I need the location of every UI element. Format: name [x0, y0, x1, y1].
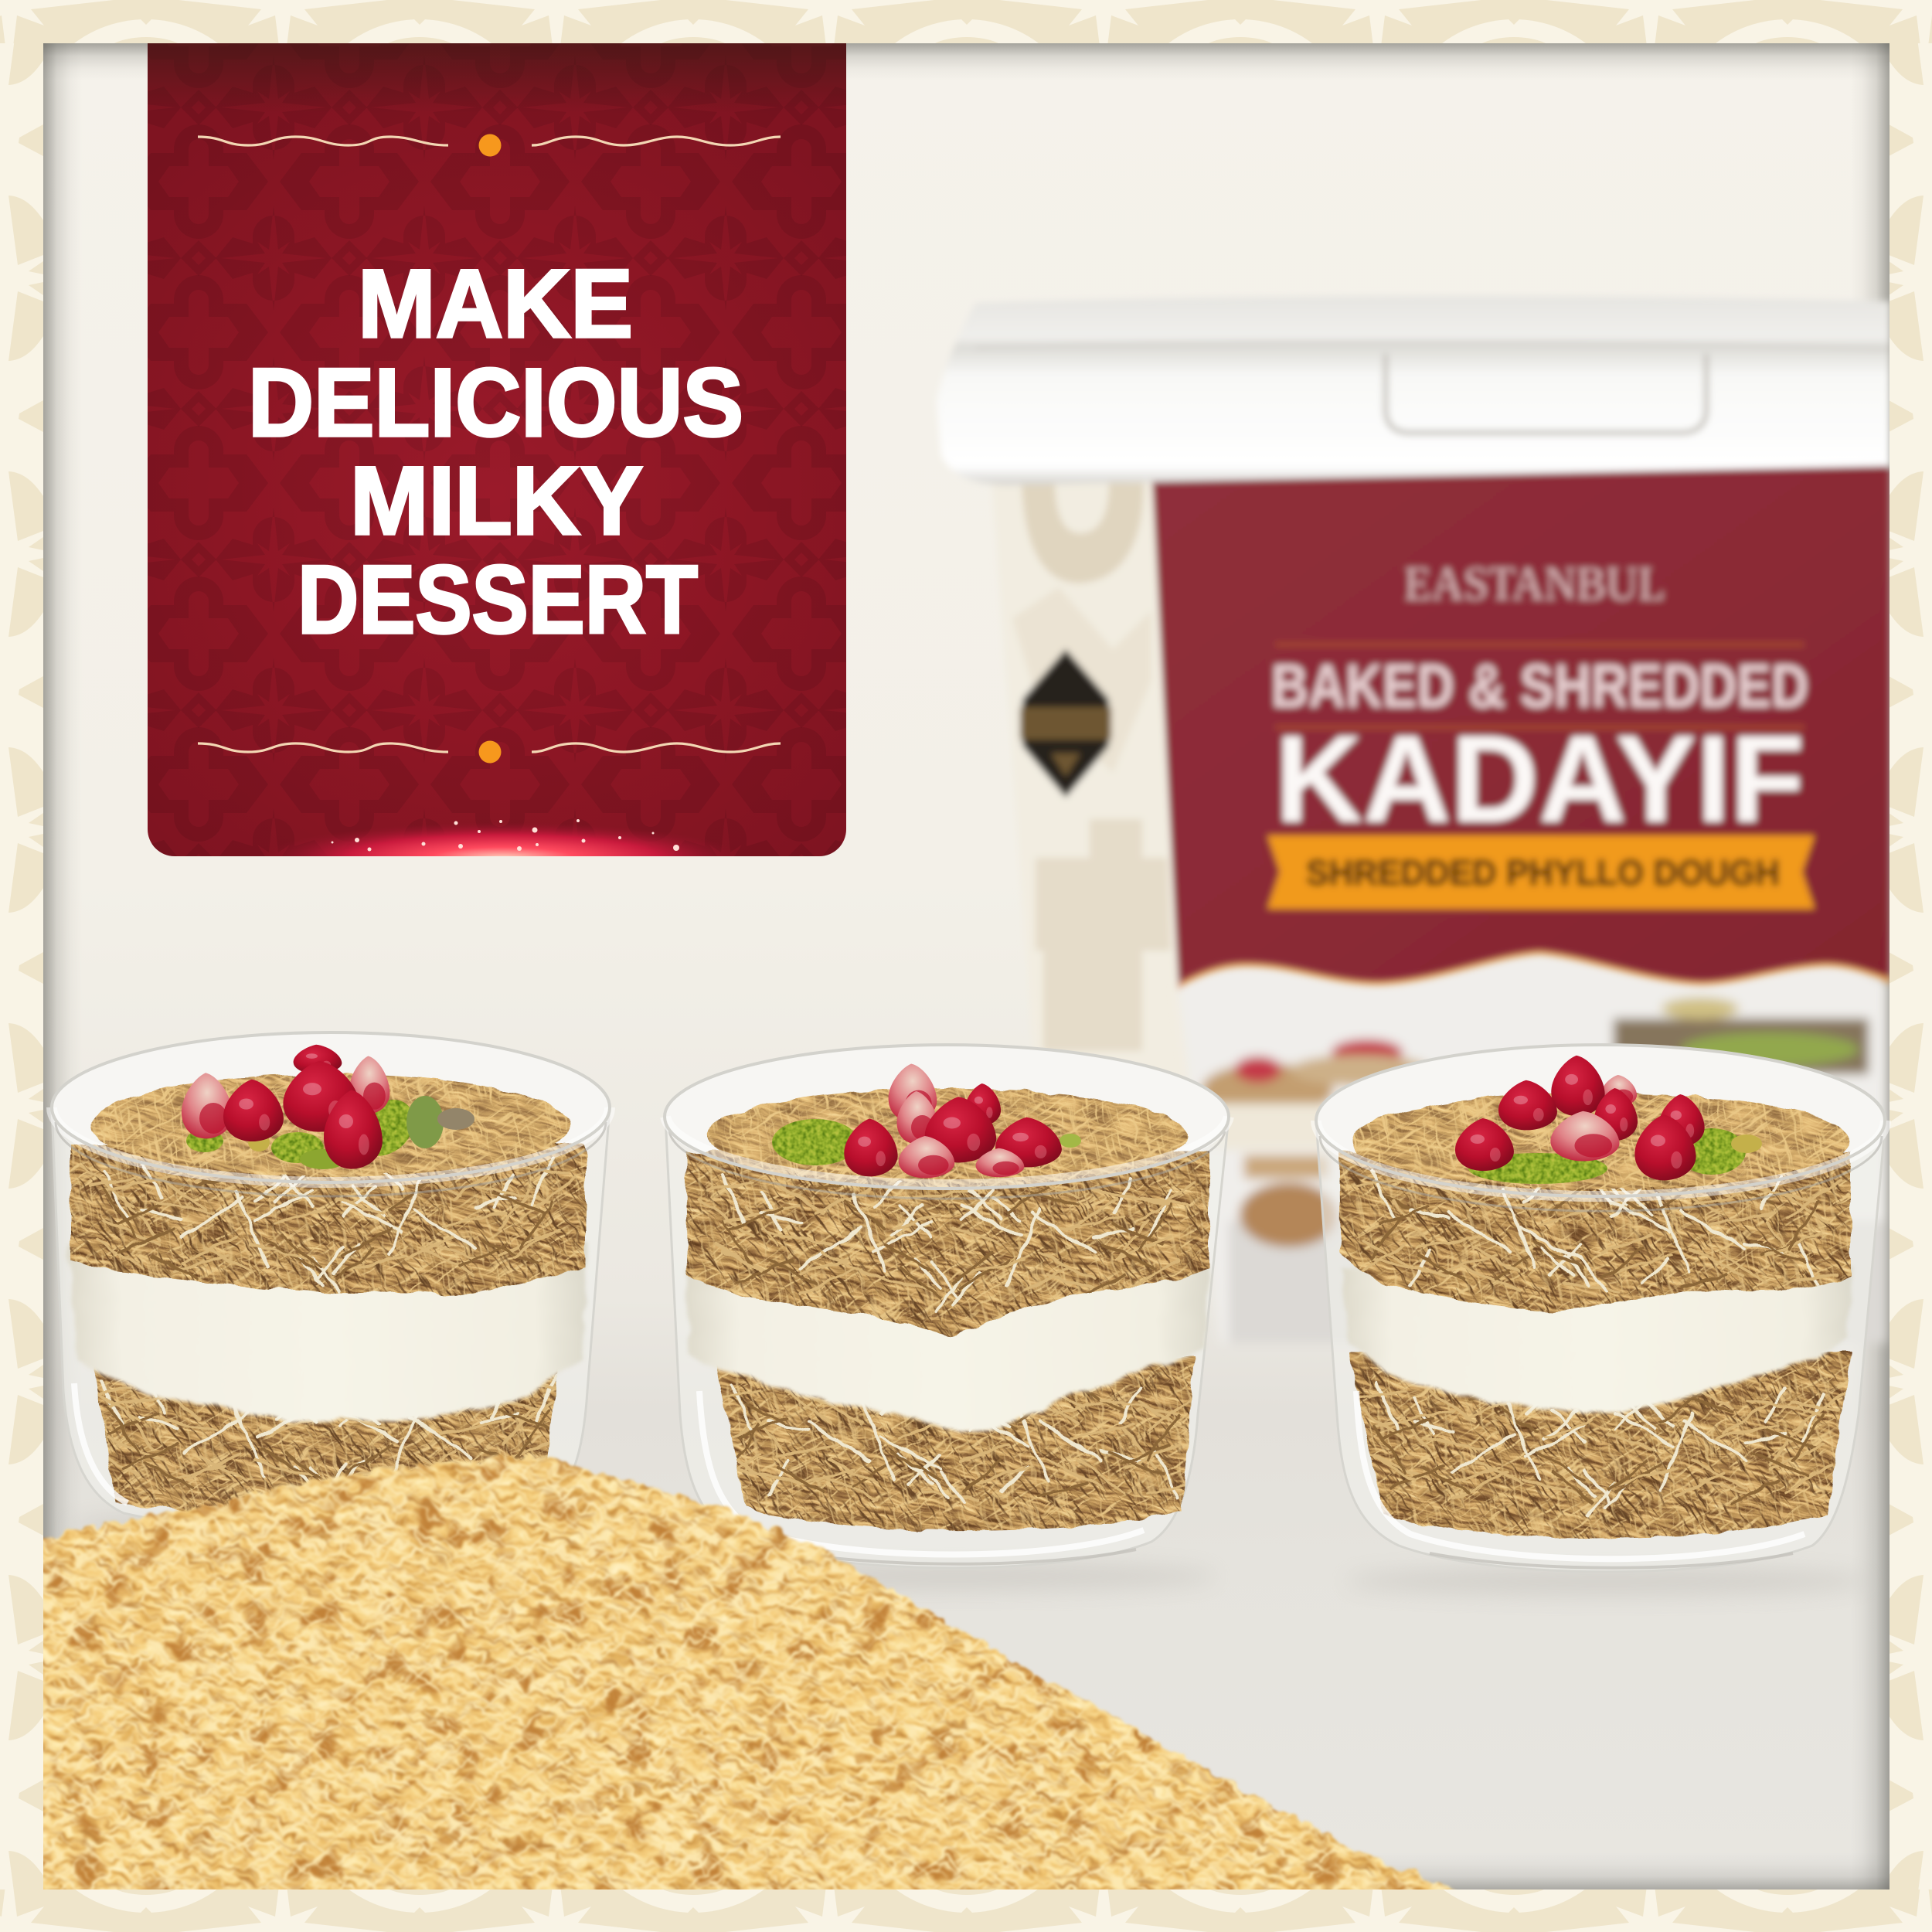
pistachio crumbs — [772, 1119, 1081, 1165]
glass body — [52, 1032, 610, 1532]
pistachio crumbs — [186, 1096, 474, 1169]
glass rim — [52, 1032, 610, 1503]
label text: kadayif: KADAYIF — [1275, 709, 1804, 848]
label photo area — [1179, 954, 1886, 1343]
lower kadayif layer — [85, 1352, 572, 1515]
title text: MAKE — [358, 250, 633, 358]
title text — [248, 250, 743, 654]
glass body — [665, 1045, 1229, 1568]
upper kadayif layer — [70, 1144, 586, 1297]
tub label — [1151, 464, 1889, 988]
pomegranate seeds — [844, 1063, 1062, 1178]
pomegranate seeds — [1455, 1056, 1705, 1180]
blurred product tub — [937, 296, 1889, 1343]
label text: brand: EASTANBUL — [1404, 558, 1665, 611]
tub body with cream pattern — [997, 480, 1185, 1054]
pomegranate seeds — [182, 1045, 389, 1169]
title text: MILKY — [350, 447, 643, 555]
top wave divider with dot — [198, 134, 781, 156]
milk pudding layer — [686, 1267, 1209, 1431]
orange ribbon: SHREDDED PHYLLO DOUGH — [1306, 852, 1780, 893]
table shadows under glasses — [68, 1511, 1870, 1595]
top surface strands — [91, 1074, 570, 1176]
dessert glass: center — [665, 1045, 1229, 1568]
bottom wave divider with dot — [198, 740, 781, 764]
title text: DELICIOUS — [248, 349, 743, 457]
glass rim — [1316, 1045, 1886, 1568]
title text: DESSERT — [298, 546, 698, 654]
milk pudding layer — [68, 1244, 587, 1422]
glass body — [1316, 1045, 1886, 1572]
upper kadayif layer — [1339, 1151, 1851, 1312]
orange ribbon — [1267, 835, 1815, 909]
upper kadayif layer — [686, 1151, 1209, 1335]
lower kadayif layer — [707, 1356, 1202, 1531]
lower kadayif layer — [1349, 1352, 1851, 1538]
top surface strands — [707, 1088, 1186, 1184]
dessert glass: right — [1316, 1045, 1886, 1572]
bottom glow with sparkles — [263, 819, 742, 893]
pistachio crumbs — [1468, 1128, 1762, 1184]
tub badge — [1020, 649, 1111, 798]
foreground pile of shredded kadayif — [28, 1454, 1492, 1909]
panel: red title card — [148, 43, 846, 893]
milk pudding layer — [1341, 1267, 1853, 1413]
dessert glass: left — [52, 1032, 610, 1532]
glass rim — [665, 1045, 1229, 1564]
lid — [937, 296, 1889, 485]
top surface strands — [1352, 1093, 1849, 1189]
label text: baked and shredded: BAKED & SHREDDED — [1271, 651, 1808, 720]
